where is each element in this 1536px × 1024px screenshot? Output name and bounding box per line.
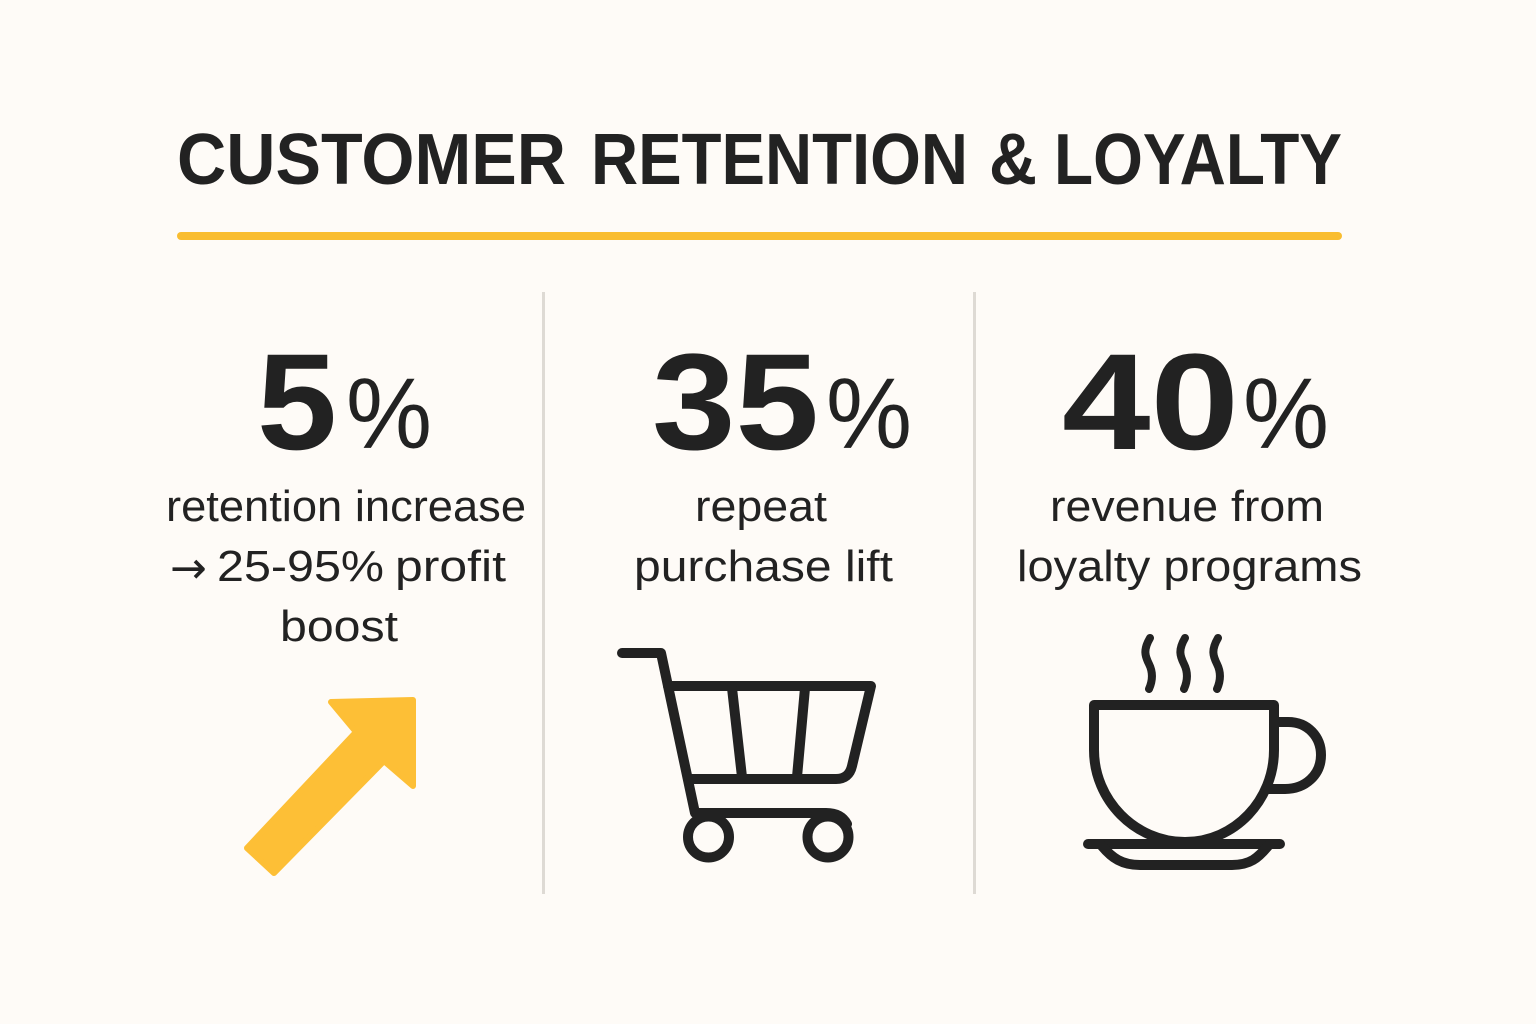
- icon: shopping cart: [622, 653, 871, 858]
- stat: 35%: [652, 326, 912, 479]
- text: retention description: 25-95%: [217, 542, 384, 591]
- title underline: [177, 232, 1342, 240]
- text: repeat description: repeat: [695, 482, 827, 531]
- title: &: [989, 120, 1037, 200]
- text: retention description: profit: [395, 542, 506, 591]
- title: [177, 120, 1342, 200]
- text: repeat description: [634, 482, 893, 591]
- text: retention description: [166, 482, 526, 651]
- stat: 35%: 35: [652, 326, 819, 479]
- text: retention description: retention increase: [166, 482, 526, 531]
- text: repeat description: purchase lift: [634, 542, 893, 591]
- title: CUSTOMER: [177, 120, 566, 200]
- text: loyalty description: [1017, 482, 1362, 591]
- text: loyalty description: revenue from: [1050, 482, 1324, 531]
- panel: loyalty revenue: [1017, 326, 1362, 865]
- text: loyalty description: loyalty programs: [1017, 542, 1362, 591]
- panel: retention: [166, 326, 526, 873]
- panel: repeat purchase: [622, 326, 912, 858]
- stat: 5%: 5: [257, 326, 337, 479]
- icon: coffee cup: [1088, 638, 1321, 865]
- stat: 5%: %: [346, 358, 432, 470]
- text: retention description: boost: [280, 602, 398, 651]
- title: LOYALTY: [1054, 120, 1342, 200]
- icon: up arrow: [247, 700, 413, 873]
- stat: 35%: %: [826, 358, 912, 470]
- stat: 5%: [257, 326, 432, 479]
- text: retention description: →: [170, 543, 207, 594]
- stat: 40%: 40: [1062, 326, 1239, 479]
- title: RETENTION: [591, 120, 968, 200]
- stat: 40%: %: [1243, 358, 1329, 470]
- stat: 40%: [1062, 326, 1329, 479]
